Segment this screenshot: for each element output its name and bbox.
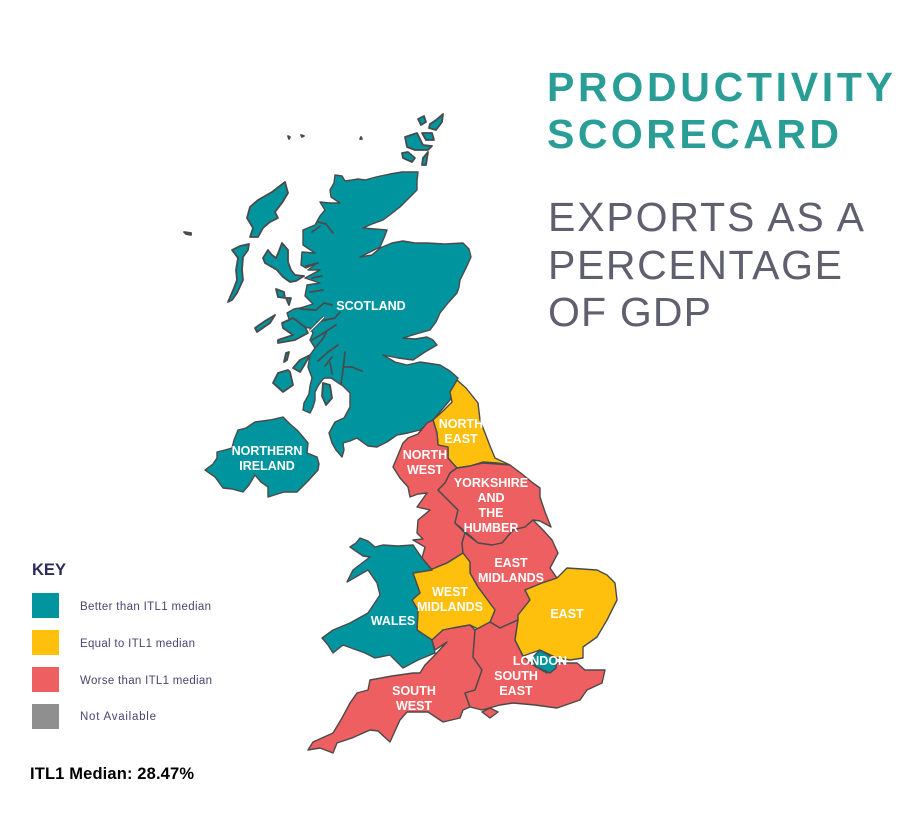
region: Northern Ireland <box>205 417 319 497</box>
region: North East <box>433 380 510 468</box>
region: Scotland <box>184 114 471 457</box>
map labels: NORTH <box>403 448 447 462</box>
map labels: IRELAND <box>239 459 295 473</box>
map labels: NORTHERN <box>232 444 302 458</box>
map labels: EAST <box>499 684 533 698</box>
title <box>547 64 893 157</box>
title: SCORECARD <box>547 111 839 157</box>
region: East Midlands <box>462 520 558 628</box>
map labels: THE <box>478 506 504 520</box>
map labels: NORTH <box>439 417 483 431</box>
map labels <box>232 299 584 713</box>
key: KEY <box>32 560 67 579</box>
map labels: WALES <box>371 614 415 628</box>
sound beside Morvern <box>310 317 324 331</box>
subtitle: PERCENTAGE <box>548 242 842 288</box>
map labels: YORKSHIRE <box>454 476 528 490</box>
key: not available <box>32 704 156 729</box>
map labels: EAST <box>494 556 528 570</box>
map labels: MIDLANDS <box>417 600 483 614</box>
map of UK regions <box>184 114 617 753</box>
key <box>32 560 212 729</box>
title: PRODUCTIVITY <box>547 64 893 110</box>
region: South West <box>308 625 482 753</box>
subtitle: OF GDP <box>548 289 711 335</box>
islands: Uists <box>228 244 249 302</box>
region: East <box>515 568 617 660</box>
subtitle <box>548 194 865 335</box>
map labels: HUMBER <box>464 521 518 535</box>
island: Arran <box>322 383 332 405</box>
islands: Lewis <box>247 182 288 237</box>
key: not available: Not Available <box>80 711 156 723</box>
map labels: LONDON <box>513 654 567 668</box>
map labels: MIDLANDS <box>478 571 544 585</box>
key: worse <box>32 667 212 692</box>
map labels: SOUTH <box>494 669 538 683</box>
map labels: SOUTH <box>392 684 436 698</box>
map labels: WEST <box>396 699 432 713</box>
key: worse: Worse than ITL1 median <box>80 675 212 687</box>
key: equal: Equal to ITL1 median <box>80 638 195 650</box>
key: better <box>32 593 211 618</box>
islands: Mull <box>278 318 308 343</box>
subtitle: EXPORTS AS A <box>548 194 865 240</box>
islands: Coll and Tiree <box>255 315 275 332</box>
map labels: AND <box>477 491 505 505</box>
islands: Islay <box>273 370 293 392</box>
region: Wales <box>322 538 435 668</box>
region: North West <box>393 420 465 570</box>
map labels: SCOTLAND <box>336 299 406 313</box>
map labels: WEST <box>432 585 468 599</box>
map labels: EAST <box>550 607 584 621</box>
region: London <box>532 650 557 673</box>
map labels: WEST <box>407 463 443 477</box>
region: South East <box>465 620 605 710</box>
map labels: EAST <box>444 432 478 446</box>
island: Isle of Wight <box>482 708 498 718</box>
islands: Skye <box>263 243 304 282</box>
key: equal <box>32 630 195 655</box>
key: better: Better than ITL1 median <box>80 601 211 613</box>
islands: Orkney <box>405 133 432 150</box>
region: Yorkshire and the Humber <box>438 463 551 545</box>
median note: ITL1 Median: 28.47% <box>30 765 194 783</box>
region: West Midlands <box>412 553 495 640</box>
islands: Jura <box>293 355 310 372</box>
sea lochs on the west coast <box>300 222 362 384</box>
